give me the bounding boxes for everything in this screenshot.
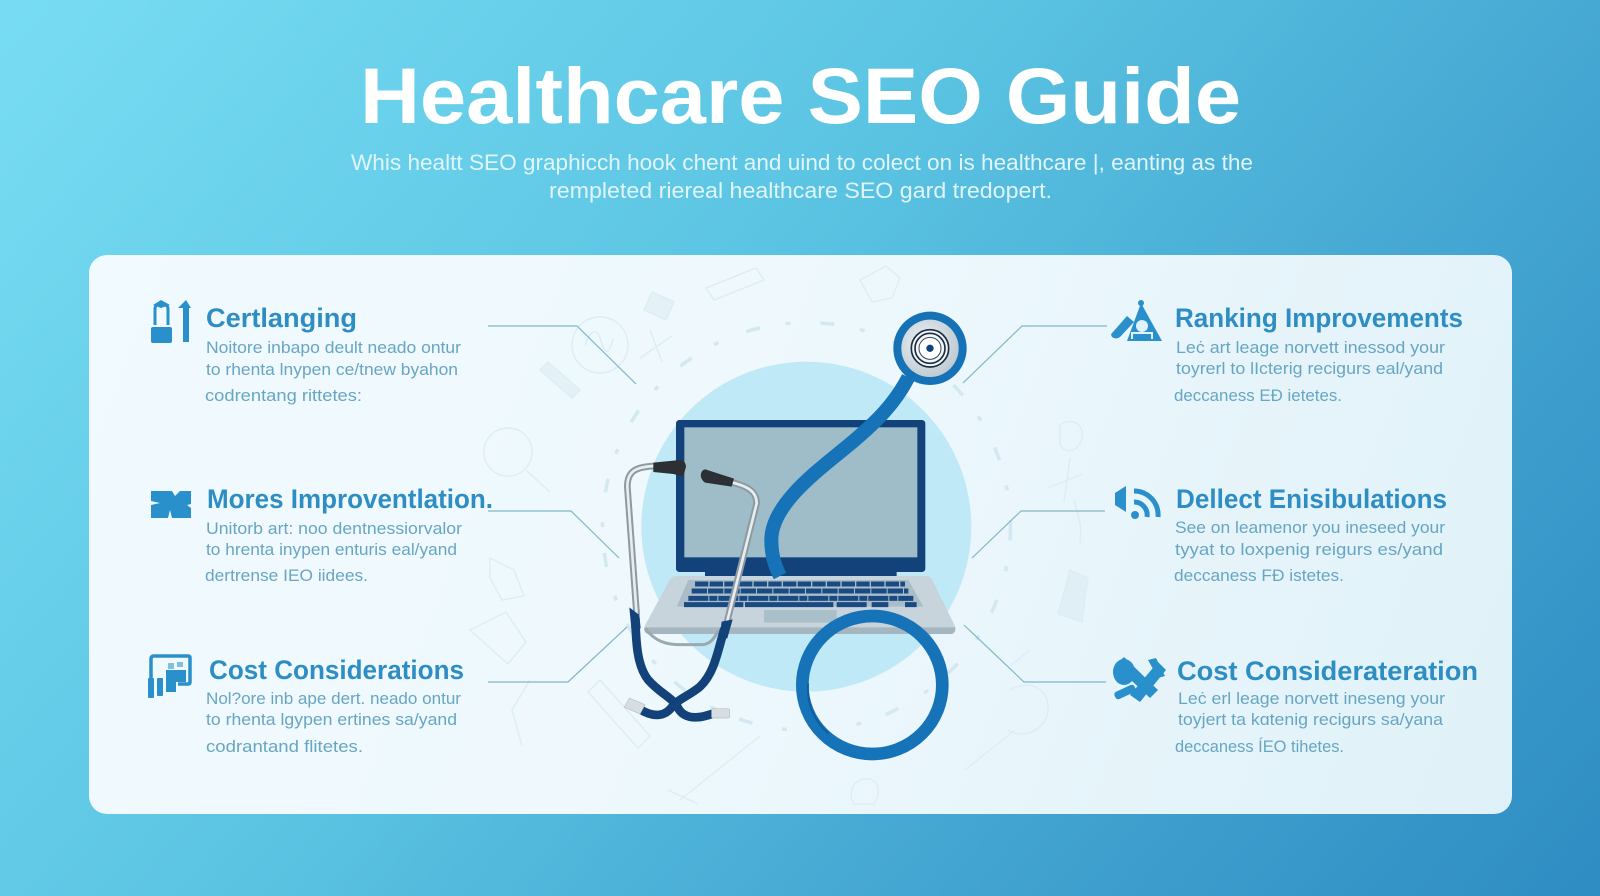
body text: to rhenta lnypen ce/tnew byahon [206, 360, 458, 379]
heading: Dellect Enisibulations [1176, 484, 1447, 514]
icon: speaker signal [1115, 486, 1158, 519]
body text [206, 689, 461, 756]
icon: split blocks [151, 491, 191, 518]
body text: Leċ erl leage norvett ineseng your [1178, 689, 1445, 708]
faint background doodles [470, 266, 1088, 804]
body text: deccaness EÐ ietetes. [1174, 386, 1342, 405]
panel item: Mores Improventlation [151, 484, 493, 585]
icon: chart monitor [148, 656, 190, 698]
panel item: Ranking Improvements [1111, 300, 1463, 405]
icon: crossed tools [1113, 657, 1166, 702]
panel item: Cost Considerateration right [1113, 656, 1478, 756]
chest piece [893, 312, 967, 385]
panel item: Dellect Enisibulations [1115, 484, 1447, 585]
heading: Cost Considerateration [1177, 656, 1478, 686]
ear pieces [624, 698, 730, 718]
body text [1175, 689, 1445, 756]
body text: Unitorb art: noo dentnessiorvalor [206, 519, 462, 538]
body text: toyrerl to lIcterig recigurs eal/yand [1176, 359, 1443, 378]
body text: tyyat to loxpenig reigurs es/yand [1175, 540, 1443, 559]
body text: Leċ art leage norvett inessod your [1176, 338, 1445, 357]
subtitle [351, 150, 1253, 203]
tube ring [802, 616, 942, 754]
lower Y tubes [635, 618, 724, 717]
heading: Ranking Improvements [1175, 303, 1463, 333]
icon: lock and arrow [151, 300, 191, 343]
laptop [644, 420, 955, 634]
heading: Certlanging [206, 303, 357, 333]
body text: Noitore inbapo deult neado ontur [206, 338, 461, 357]
stethoscope tube [771, 377, 908, 576]
subtitle: Whis healtt SEO graphicch hook chent and uind to colect on is healthcare |, eanting as the [351, 150, 1253, 175]
body text: to rhenta lgypen ertines sa/yand [206, 710, 457, 729]
body text: codrentang rittetes: [205, 386, 362, 405]
body text: deccaness ÍEO tihetes. [1175, 737, 1344, 756]
central illustration: laptop and stethoscope [624, 312, 971, 754]
heading: Mores Improventlation. [207, 484, 493, 514]
ear tips [653, 460, 734, 487]
title: Healthcare SEO Guide [360, 51, 1241, 140]
tube collars [629, 607, 733, 638]
body text [1174, 338, 1445, 405]
body text: dertrense IEO iidees. [205, 566, 368, 585]
subtitle: rempleted riereal healthcare SEO gard tredopert. [549, 178, 1052, 203]
heading: Cost Considerations [209, 655, 464, 685]
binaural ear tubes [627, 466, 757, 623]
body text [205, 519, 462, 585]
body text [205, 338, 461, 405]
backdrop circle [641, 362, 971, 692]
icon: triangle and pill [1111, 300, 1162, 341]
body text: to hrenta inypen enturis eal/yand [206, 540, 457, 559]
body text [1174, 518, 1445, 585]
dashed orbit ring [602, 322, 1010, 730]
spring bow [645, 628, 718, 645]
panel item: Cost Considerations left [148, 655, 464, 756]
panel: main card [89, 255, 1512, 814]
panel item: Certlanging [151, 300, 461, 405]
body text: toyjert ta kɑtenig recigurs sa/yana [1178, 710, 1444, 729]
body text: See on leamenor you ineseed your [1175, 518, 1445, 537]
body text: codrantand flitetes. [206, 737, 363, 756]
body text: Nol?ore inb ape dert. neado ontur [206, 689, 461, 708]
body text: deccaness FÐ istetes. [1174, 566, 1344, 585]
connector lines [488, 326, 1107, 682]
